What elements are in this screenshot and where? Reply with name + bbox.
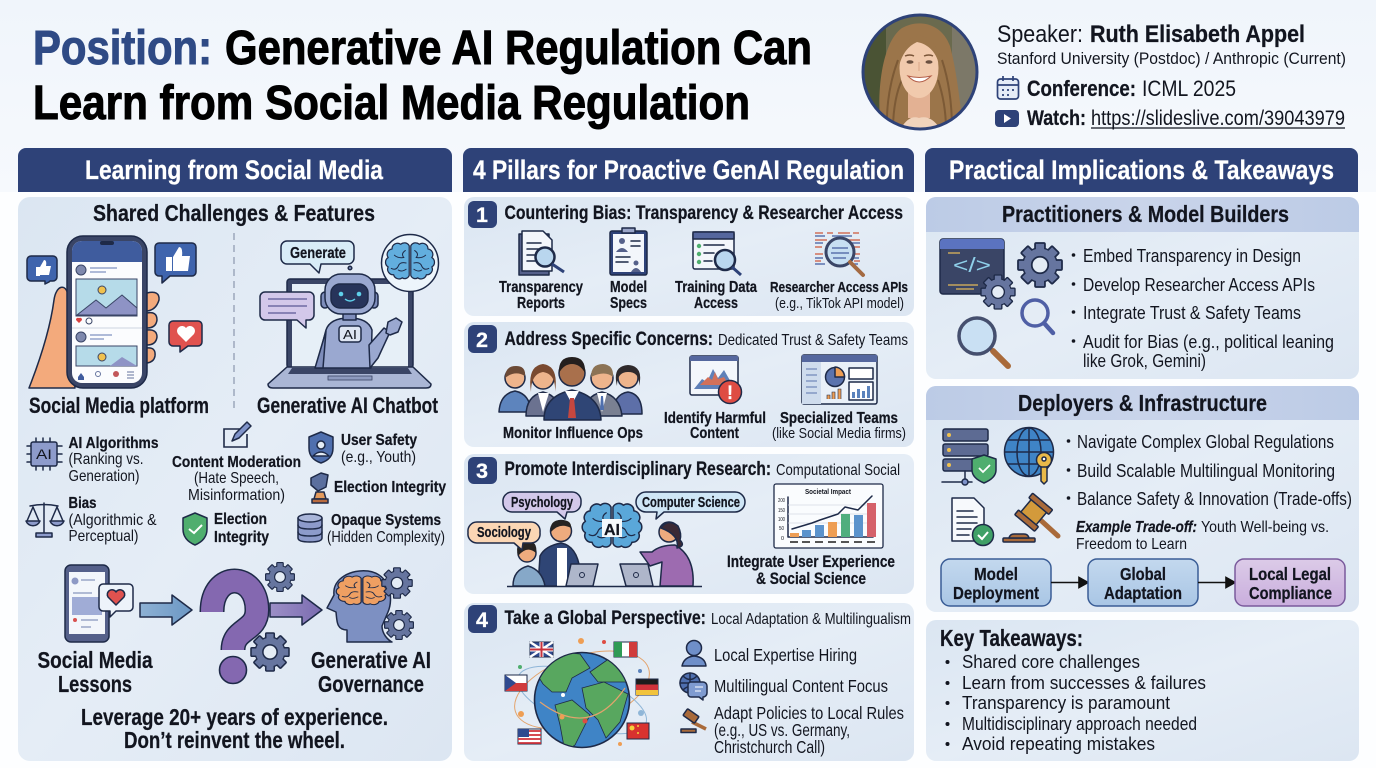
icon: model spec clipboard bbox=[610, 228, 647, 275]
illustration: globe with flags bbox=[514, 638, 650, 748]
feature: election integrity trophy bbox=[311, 473, 446, 503]
flow: global adaptation: Global bbox=[1120, 564, 1166, 584]
label: identify harmful content: Content bbox=[690, 425, 740, 442]
feature: content moderation bbox=[172, 422, 301, 504]
feature: AI algorithms: AI Algorithms bbox=[68, 435, 159, 452]
heading: practitioners: Practitioners & Model Builders bbox=[1002, 201, 1289, 227]
item: local expertise hiring bbox=[682, 640, 857, 666]
list: takeaways: Avoid repeating mistakes bbox=[962, 733, 1155, 754]
panel: deployers bbox=[926, 386, 1359, 612]
label: model specs bbox=[610, 279, 647, 312]
icon: code window: </> bbox=[953, 255, 991, 277]
flow: local legal compliance: Compliance bbox=[1249, 583, 1332, 603]
speaker portrait bbox=[864, 16, 976, 128]
heading: address specific concerns bbox=[504, 329, 908, 350]
label: transparency reports: Transparency bbox=[499, 279, 583, 296]
illustration: team of five bbox=[499, 357, 642, 420]
list: takeaways bbox=[946, 651, 1206, 754]
heading: address specific concerns: Address Specific Concerns: bbox=[504, 329, 713, 350]
label: specialized teams: Specialized Teams bbox=[780, 410, 898, 427]
panel: pillar 4 bbox=[464, 603, 914, 761]
heading: shared challenges: Shared Challenges & Features bbox=[93, 200, 375, 226]
illustration: AI chatbot laptop bbox=[268, 266, 431, 388]
chart: societal impact: 200 bbox=[778, 498, 785, 504]
icon: harmful content chart bbox=[690, 356, 742, 404]
label: model specs: Model bbox=[610, 279, 647, 296]
icon: question mark bbox=[212, 581, 257, 684]
list: takeaways: Learn from successes & failures bbox=[962, 672, 1206, 693]
panel: key takeaways bbox=[926, 620, 1359, 761]
column header bars: 4 Pillars for Proactive GenAI Regulation bbox=[473, 155, 904, 185]
feature: opaque systems bbox=[298, 512, 445, 546]
flow: model deployment bbox=[941, 559, 1051, 606]
title: Learn from Social Media Regulation bbox=[33, 77, 750, 130]
panel: practitioners bbox=[926, 197, 1359, 379]
flag: USA bbox=[518, 729, 541, 744]
label: identify harmful content bbox=[664, 410, 766, 442]
label: identify harmful content: Identify Harmful bbox=[664, 410, 766, 427]
feature: AI algorithms: AI bbox=[36, 446, 52, 462]
feature: content moderation: Misinformation) bbox=[188, 487, 285, 504]
heading: global perspective bbox=[504, 608, 911, 629]
feature: AI algorithms bbox=[27, 435, 159, 485]
speaker details: Ruth Elisabeth Appel bbox=[1090, 21, 1305, 48]
icon: server with shield bbox=[942, 429, 996, 485]
example trade-off: Youth Well-being vs. bbox=[1201, 519, 1329, 536]
label: model specs: Specs bbox=[610, 295, 647, 312]
icon: gear bottom bbox=[251, 633, 289, 671]
badge 3 bbox=[468, 457, 497, 484]
feature: user safety: (e.g., Youth) bbox=[341, 449, 416, 466]
speaker details bbox=[997, 21, 1346, 130]
heading: generative AI chatbot: Generative AI Chatbot bbox=[257, 393, 439, 418]
icon: video play bbox=[995, 110, 1019, 127]
icon: small magnifier bbox=[1022, 300, 1053, 333]
icon: gavel bbox=[1003, 493, 1058, 542]
arrow: lessons to question bbox=[140, 595, 192, 625]
list: takeaways: Multidisciplinary approach needed bbox=[962, 713, 1197, 734]
badge 2: 2 bbox=[476, 329, 488, 352]
label: training data access: Training Data bbox=[675, 279, 757, 296]
icon: AI brain: AI bbox=[604, 522, 620, 539]
flow: local legal compliance bbox=[1235, 559, 1345, 606]
title: Position: bbox=[33, 22, 212, 75]
feature: opaque systems: Opaque Systems bbox=[331, 512, 441, 529]
label: specialized teams: (like Social Media firms) bbox=[772, 425, 906, 442]
list: practitioner actions bbox=[1072, 246, 1334, 371]
icon: large like bubble bbox=[155, 243, 196, 283]
chart: societal impact: 50 bbox=[779, 526, 784, 532]
feature: AI algorithms: Generation) bbox=[68, 468, 140, 485]
feature: user safety bbox=[309, 432, 417, 466]
flow: global adaptation bbox=[1088, 559, 1198, 606]
label: transparency reports bbox=[499, 279, 583, 312]
label: integrate user experience: Integrate User Experience bbox=[727, 553, 895, 571]
portrait ring bbox=[863, 15, 977, 129]
feature: election integrity shield: Election bbox=[214, 511, 267, 528]
speaker details: Stanford University (Postdoc) / Anthropic (Current) bbox=[997, 49, 1346, 68]
icon: large gear bbox=[1018, 243, 1062, 287]
icon: brain thought bubble bbox=[382, 234, 438, 292]
chart: societal impact: 100 bbox=[778, 517, 785, 523]
badge 1: 1 bbox=[476, 204, 488, 227]
list: deployer actions: Navigate Complex Global Regulations bbox=[1077, 432, 1334, 452]
label: specialized teams bbox=[772, 410, 906, 442]
item: multilingual content focus bbox=[680, 673, 707, 700]
illustration: people collaborating bbox=[507, 520, 702, 586]
heading: social media platform: Social Media platform bbox=[29, 393, 209, 418]
flow labels bbox=[38, 647, 431, 697]
speaker details: Conference: bbox=[1027, 76, 1136, 101]
icon: harmful content chart: ! bbox=[727, 383, 733, 404]
item: adapt policies: (e.g., US vs. Germany, bbox=[714, 720, 850, 740]
icon: calendar bbox=[998, 76, 1018, 99]
speaker details: Watch: bbox=[1027, 107, 1086, 130]
feature: opaque systems: (Hidden Complexity) bbox=[327, 529, 445, 546]
badge 1 bbox=[468, 201, 497, 228]
arrow: adaptation to compliance bbox=[1198, 578, 1235, 588]
title: Generative AI Regulation Can bbox=[225, 22, 812, 75]
flow labels: Lessons bbox=[58, 671, 132, 697]
list: takeaways: Shared core challenges bbox=[962, 651, 1140, 672]
flow labels: Governance bbox=[318, 671, 424, 697]
icon: heart bubble bbox=[169, 321, 202, 352]
heading: deployers: Deployers & Infrastructure bbox=[1018, 390, 1267, 416]
illustration: AI chatbot laptop: AI bbox=[343, 327, 357, 342]
feature: bias bbox=[26, 495, 157, 545]
list: practitioner actions: Integrate Trust & Safety Teams bbox=[1083, 303, 1301, 323]
heading: countering bias: Countering Bias: Transparency & Researcher Access bbox=[504, 203, 903, 224]
chart: societal impact bbox=[774, 484, 883, 548]
chart: societal impact: Societal Impact bbox=[805, 487, 851, 496]
list: practitioner actions: like Grok, Gemini) bbox=[1083, 351, 1206, 371]
flow labels: Generative AI bbox=[311, 647, 431, 673]
bubble: sociology bbox=[468, 522, 540, 550]
speaker details: ICML 2025 bbox=[1142, 76, 1236, 101]
badge 3: 3 bbox=[476, 460, 488, 483]
column header bars bbox=[18, 148, 1358, 192]
list: practitioner actions: Audit for Bias (e.g., political leaning bbox=[1083, 332, 1334, 352]
bubble: generate: Generate bbox=[290, 245, 346, 262]
flow labels: Social Media bbox=[38, 647, 153, 673]
flag: Italy bbox=[614, 642, 637, 657]
label: transparency reports: Reports bbox=[517, 295, 565, 312]
heading: address specific concerns: Dedicated Trust & Safety Teams bbox=[718, 332, 908, 349]
example trade-off bbox=[1076, 519, 1329, 553]
feature: election integrity trophy: Election Integrity bbox=[334, 479, 446, 496]
arrow: deployment to adaptation bbox=[1051, 578, 1088, 588]
icon: social media lessons phone bbox=[65, 565, 133, 642]
label: researcher access APIs: Researcher Access APIs bbox=[770, 279, 908, 296]
chart: societal impact: 150 bbox=[778, 508, 785, 514]
icon: small like bubble bbox=[27, 256, 57, 284]
flow: global adaptation: Adaptation bbox=[1104, 583, 1182, 603]
flag: UK bbox=[530, 642, 553, 657]
feature: content moderation: (Hate Speech, bbox=[194, 470, 279, 487]
column header bars: Learning from Social Media bbox=[85, 155, 384, 185]
icon: transparency report bbox=[519, 231, 564, 275]
heading: promote interdisciplinary research: Computational Social bbox=[776, 462, 900, 479]
bubble: computer science: Computer Science bbox=[642, 495, 740, 511]
item: adapt policies bbox=[681, 703, 904, 757]
flow: model deployment: Model bbox=[974, 564, 1018, 584]
closing message: Leverage 20+ years of experience. bbox=[81, 704, 388, 730]
label: training data access bbox=[675, 279, 757, 312]
panel: learning from social media bbox=[18, 197, 452, 761]
list: deployer actions: Build Scalable Multilingual Monitoring bbox=[1077, 461, 1335, 481]
list: deployer actions bbox=[1067, 432, 1352, 509]
label: researcher access APIs: (e.g., TikTok API model) bbox=[775, 296, 904, 312]
heading: promote interdisciplinary research: Promote Interdisciplinary Research: bbox=[504, 459, 771, 480]
panel: pillar 1 bbox=[464, 197, 914, 316]
bubble: sociology: Sociology bbox=[477, 524, 531, 541]
flag: Czechia bbox=[505, 675, 527, 691]
icon: researcher API magnifier bbox=[815, 233, 863, 275]
label: monitor influence ops: Monitor Influence Ops bbox=[503, 425, 643, 442]
list: takeaways: Transparency is paramount bbox=[962, 692, 1170, 713]
arrow: question to governance bbox=[270, 595, 322, 625]
bubble: lavender chat bbox=[260, 292, 314, 328]
feature: bias: Perceptual) bbox=[68, 528, 138, 545]
flag: China bbox=[627, 723, 649, 739]
list: practitioner actions: Develop Researcher Access APIs bbox=[1083, 275, 1315, 295]
heading: key takeaways: Key Takeaways: bbox=[940, 625, 1083, 651]
feature: content moderation: Content Moderation bbox=[172, 454, 301, 471]
example trade-off: Example Trade-off: bbox=[1076, 519, 1197, 536]
icon: gear top bbox=[266, 563, 294, 591]
example trade-off: Freedom to Learn bbox=[1076, 536, 1187, 553]
feature: election integrity shield: Integrity bbox=[214, 529, 269, 546]
label: training data access: Access bbox=[694, 295, 738, 312]
badge 2 bbox=[468, 325, 497, 353]
feature: bias: Bias bbox=[68, 495, 97, 512]
flow: model deployment: Deployment bbox=[953, 583, 1039, 603]
icon: large magnifier bbox=[959, 318, 1008, 366]
bubble: computer science bbox=[636, 492, 745, 519]
bubble: psychology bbox=[503, 492, 581, 519]
closing message: Don’t reinvent the wheel. bbox=[124, 727, 345, 753]
bubble: psychology: Psychology bbox=[511, 494, 573, 511]
heading: global perspective: Take a Global Perspective: bbox=[504, 608, 706, 629]
chart: societal impact: 0 bbox=[781, 536, 784, 542]
heading: global perspective: Local Adaptation & Multilingualism bbox=[711, 611, 911, 628]
list: practitioner actions: Embed Transparency in Design bbox=[1083, 246, 1301, 266]
feature: election integrity shield bbox=[183, 511, 269, 546]
label: integrate user experience: & Social Science bbox=[756, 570, 866, 588]
label: researcher access APIs bbox=[770, 279, 908, 312]
label: multilingual content focus: Multilingual Content Focus bbox=[714, 676, 888, 696]
item: adapt policies: Christchurch Call) bbox=[714, 737, 825, 757]
icon: small gear bbox=[981, 275, 1015, 309]
bubble: generate bbox=[281, 241, 354, 273]
icon: training data bbox=[693, 232, 741, 275]
icon: code window bbox=[940, 239, 1004, 294]
speaker details: https://slideslive.com/39043979 bbox=[1091, 107, 1345, 130]
item: adapt policies: Adapt Policies to Local Rules bbox=[714, 703, 904, 723]
feature: user safety: User Safety bbox=[341, 432, 417, 449]
panel: pillar 2 bbox=[464, 322, 914, 447]
illustration: hand holding phone bbox=[29, 236, 159, 388]
icon: globe with key bbox=[1004, 428, 1054, 484]
speaker details: Speaker: bbox=[997, 21, 1083, 48]
title bbox=[33, 22, 812, 130]
icon: head with brain and gears bbox=[327, 568, 413, 642]
icon: AI brain bbox=[582, 503, 642, 547]
closing message bbox=[81, 704, 388, 753]
badge 4 bbox=[468, 605, 497, 633]
icon: dashboard bbox=[802, 355, 877, 404]
feature: AI algorithms: (Ranking vs. bbox=[68, 451, 144, 468]
feature: bias: (Algorithmic & bbox=[68, 512, 157, 529]
item: local expertise hiring: Local Expertise Hiring bbox=[714, 645, 857, 665]
icon: document with check bbox=[952, 498, 994, 546]
badge 4: 4 bbox=[476, 609, 488, 632]
flow: local legal compliance: Local Legal bbox=[1249, 564, 1331, 584]
flag: Germany bbox=[636, 679, 658, 695]
label: integrate user experience bbox=[727, 553, 895, 588]
panel: pillar 3 bbox=[464, 454, 914, 594]
